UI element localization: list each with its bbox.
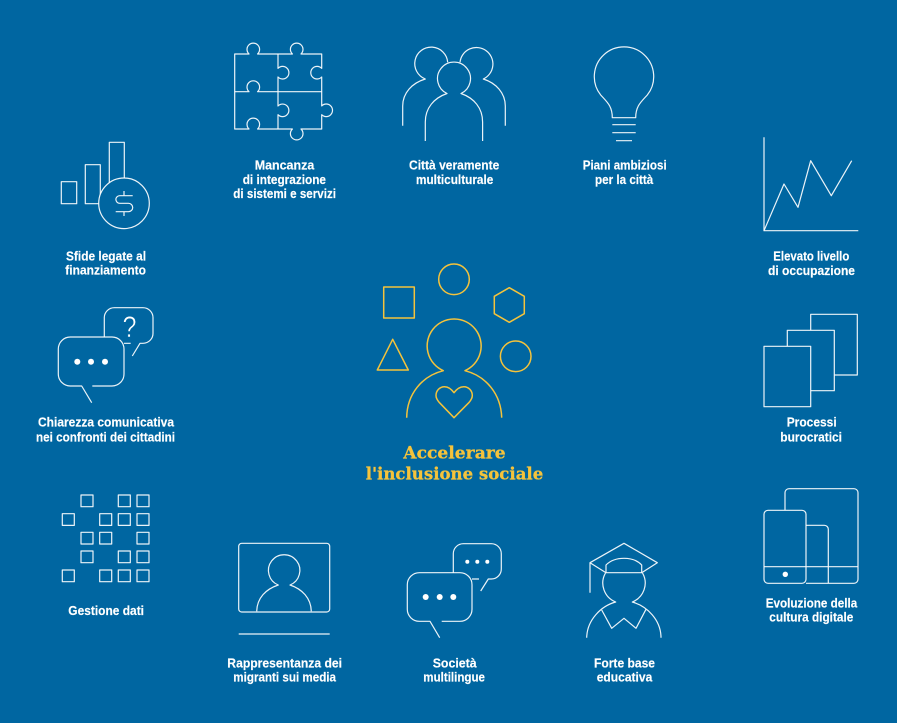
label: financing: Sfide legate al bbox=[66, 250, 146, 264]
icon: light bulb bbox=[594, 47, 654, 141]
panel: data bbox=[62, 495, 149, 618]
panel: education bbox=[587, 543, 661, 685]
label: bureaucracy: burocratici bbox=[780, 431, 842, 445]
label: communication: nei confronti dei cittadini bbox=[36, 431, 175, 445]
panel: central bbox=[366, 264, 543, 484]
label: people: Città veramente bbox=[409, 158, 499, 172]
panel: employment bbox=[764, 137, 858, 278]
label: media: Rappresentanza dei bbox=[227, 656, 342, 670]
icon: person with shapes bbox=[377, 264, 531, 418]
icon: puzzle bbox=[235, 43, 333, 140]
label: languages: multilingue bbox=[423, 671, 485, 685]
label: light bulb bbox=[583, 158, 667, 187]
label: communication bbox=[36, 416, 175, 445]
label: employment: di occupazione bbox=[768, 264, 855, 278]
panel: bureaucracy bbox=[764, 314, 857, 445]
label: digital culture: Evoluzione della bbox=[766, 597, 858, 611]
icon: three people bbox=[403, 47, 505, 141]
label: people: multiculturale bbox=[416, 173, 493, 187]
label: light bulb: per la città bbox=[595, 173, 653, 187]
label: media bbox=[227, 656, 342, 684]
title: l'inclusione sociale bbox=[366, 464, 543, 484]
label: education: educativa bbox=[597, 671, 653, 685]
label: puzzle bbox=[233, 158, 336, 201]
icon: data squares bbox=[62, 495, 149, 582]
icon: line chart bbox=[764, 137, 858, 231]
panel: media bbox=[227, 543, 342, 684]
label: light bulb: Piani ambiziosi bbox=[583, 158, 667, 172]
panel: languages bbox=[407, 544, 501, 685]
icon: speech bubbles with question: ? bbox=[122, 311, 136, 344]
label: languages: Società bbox=[433, 656, 477, 670]
title bbox=[366, 443, 543, 484]
label: employment bbox=[768, 250, 855, 278]
label: puzzle: di sistemi e servizi bbox=[233, 187, 336, 201]
label: bureaucracy bbox=[780, 416, 842, 445]
label: digital culture bbox=[766, 597, 858, 625]
panel: digital culture bbox=[764, 489, 858, 625]
label: puzzle: Mancanza bbox=[255, 158, 315, 172]
label: people bbox=[409, 158, 499, 187]
panel: people bbox=[403, 47, 505, 187]
label: financing bbox=[65, 250, 146, 278]
label: financing: finanziamento bbox=[65, 264, 146, 278]
icon: devices bbox=[764, 489, 858, 583]
icon: bars and coin bbox=[61, 142, 149, 229]
panel: financing bbox=[61, 142, 149, 278]
panel: light bulb bbox=[583, 47, 667, 187]
label: data: Gestione dati bbox=[68, 604, 144, 618]
label: employment: Elevato livello bbox=[773, 250, 850, 264]
label: media: migranti sui media bbox=[233, 670, 337, 684]
title: Accelerare bbox=[402, 443, 506, 463]
icon: person on screen bbox=[239, 543, 330, 634]
label: bureaucracy: Processi bbox=[787, 416, 837, 430]
icon: graduate bbox=[587, 543, 661, 638]
icon: stacked documents bbox=[764, 314, 857, 407]
label: education bbox=[594, 656, 655, 685]
label: languages bbox=[423, 656, 485, 685]
icon: speech bubbles bbox=[407, 544, 501, 638]
label: education: Forte base bbox=[594, 656, 655, 670]
label: puzzle: di integrazione bbox=[243, 173, 326, 187]
panel: communication bbox=[36, 308, 175, 445]
label: digital culture: cultura digitale bbox=[769, 611, 853, 625]
panel: puzzle bbox=[233, 43, 336, 201]
label: communication: Chiarezza comunicativa bbox=[38, 416, 175, 430]
